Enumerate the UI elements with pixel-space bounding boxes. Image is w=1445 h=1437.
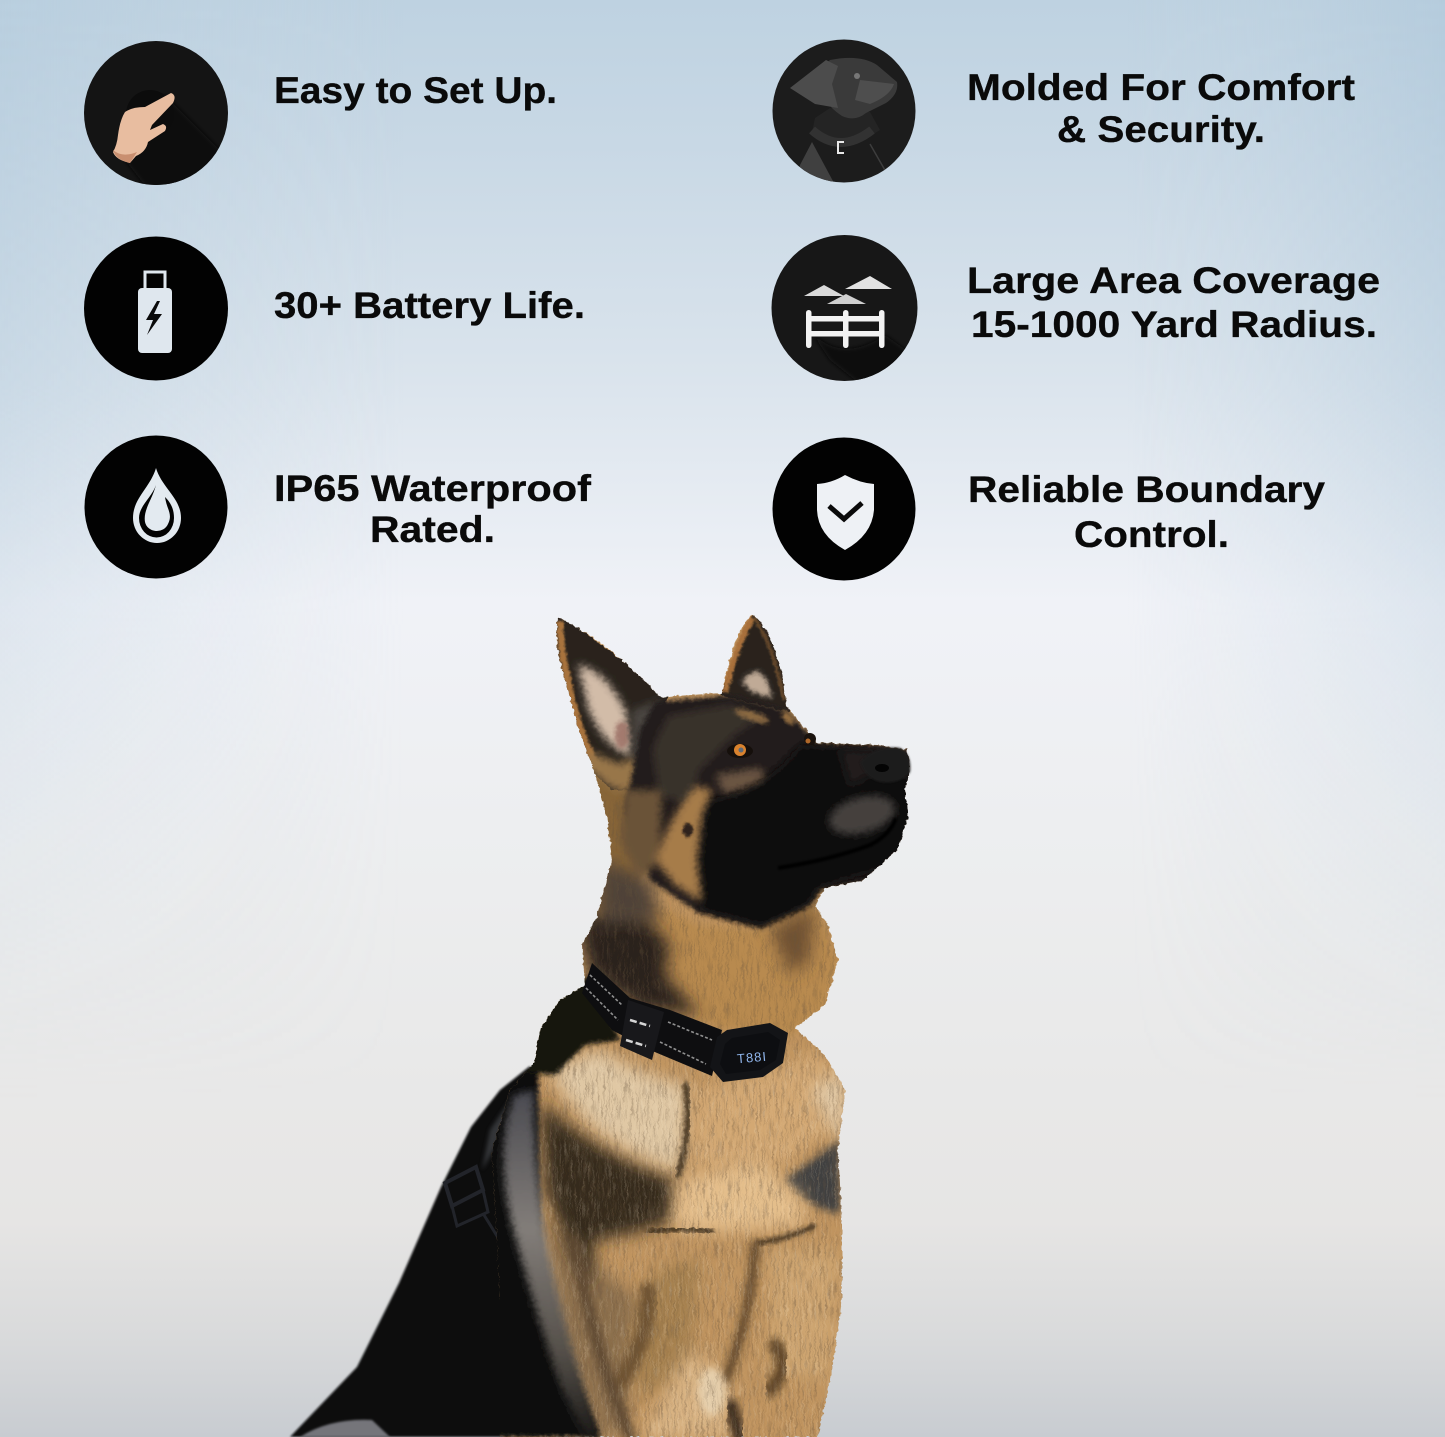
left ear inner light <box>578 665 632 756</box>
text: boundary control: Control. <box>1074 514 1229 555</box>
icon: battery <box>84 236 228 380</box>
under eye brown <box>715 768 770 795</box>
icon: shield with check <box>772 438 916 580</box>
base tan <box>491 614 910 1437</box>
flank brown <box>545 1220 640 1437</box>
fur texture light <box>540 1050 850 1437</box>
text: easy to set up: Easy to Set Up. <box>274 70 557 111</box>
nostril <box>875 764 889 772</box>
feature: boundary control <box>772 438 1325 580</box>
grey flank strip <box>503 1090 600 1437</box>
left ear base gold <box>589 747 637 791</box>
text: molded for comfort: & Security. <box>1057 109 1265 150</box>
text: area coverage <box>967 260 1380 345</box>
text: waterproof <box>274 468 592 550</box>
neck base tan <box>652 904 839 1035</box>
head upper brown fur <box>652 704 765 805</box>
collar strap <box>582 963 722 1076</box>
nose <box>860 748 910 783</box>
text: boundary control <box>968 469 1325 555</box>
text: area coverage: Large Area Coverage <box>967 260 1380 301</box>
brows <box>733 706 771 726</box>
display reading: T88I <box>736 1049 768 1066</box>
icon: pointing hand <box>84 41 228 185</box>
mouth line <box>778 818 896 868</box>
dog photo: German shepherd wearing collar <box>290 600 930 1437</box>
neck behind head <box>594 770 640 922</box>
light chest <box>672 1160 805 1232</box>
text: waterproof: IP65 Waterproof <box>274 468 592 509</box>
icon: dog with collar <box>772 40 916 183</box>
left shoulder dark patch <box>540 1100 676 1290</box>
text: waterproof: Rated. <box>370 509 495 550</box>
dog fur and shading <box>491 614 910 1437</box>
muzzle speckle <box>824 789 900 841</box>
fur texture dark <box>540 800 850 1437</box>
feature: area coverage <box>772 235 1380 400</box>
right ruff <box>692 1050 838 1170</box>
icon: water drop <box>84 436 228 578</box>
text: boundary control: Reliable Boundary <box>968 469 1325 510</box>
coat shoulder highlight <box>482 1085 520 1170</box>
icon: fence and mountains <box>772 235 920 400</box>
left ear rim <box>560 621 597 768</box>
cheek dark spot <box>683 823 693 837</box>
black mask <box>697 745 912 926</box>
text: battery life: 30+ Battery Life. <box>274 285 585 326</box>
ruff <box>550 1050 688 1172</box>
lower chest shading <box>630 1260 700 1400</box>
text: molded for comfort: Molded For Comfort <box>967 67 1355 108</box>
neck side fur under ear <box>620 790 662 880</box>
right ear <box>720 610 790 712</box>
harness buckle <box>445 1167 515 1265</box>
feature: easy to set up <box>84 41 555 185</box>
right shoulder dark patch <box>784 1140 840 1214</box>
tan cheek <box>655 786 712 902</box>
dark fur behind flank <box>491 1060 602 1437</box>
feature: molded for comfort <box>772 40 1355 183</box>
eyes <box>727 733 816 758</box>
feature: battery life <box>84 236 585 380</box>
chest creases <box>575 1085 814 1437</box>
head base <box>625 695 912 928</box>
collar loop <box>620 1000 664 1060</box>
left ear base <box>555 610 668 790</box>
feature: waterproof <box>84 436 592 578</box>
neck dark fur <box>578 900 700 1015</box>
left ear pink <box>615 721 629 749</box>
text: area coverage: 15-1000 Yard Radius. <box>971 304 1377 345</box>
lower chest light patch <box>698 1368 726 1416</box>
coat lower grey patch <box>300 1420 390 1437</box>
text: molded for comfort <box>967 67 1355 150</box>
under jaw shadow <box>770 905 815 975</box>
right ear inner light <box>742 672 772 698</box>
shoulder black fur <box>525 975 620 1075</box>
collar device <box>710 1023 788 1082</box>
dog coat and harness <box>290 1066 600 1437</box>
